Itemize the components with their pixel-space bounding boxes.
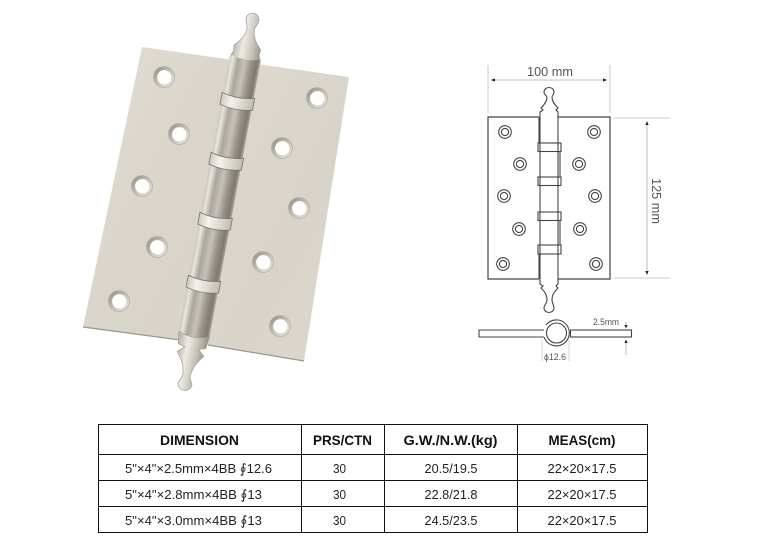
table grid: [98, 424, 648, 533]
table row 3: 5"×4"×3.0mm×4BB ∮13: [125, 513, 262, 528]
drawing screw holes: [497, 126, 602, 270]
table row 2: [125, 487, 616, 502]
table row 1: 20.5/19.5: [424, 461, 478, 476]
hinge outline: [488, 88, 610, 312]
top finial: [230, 10, 269, 63]
screw holes: [108, 66, 328, 336]
table row 3: 22×20×17.5: [548, 513, 616, 528]
bottom finial outline: [540, 279, 558, 312]
technical drawing: section view: [479, 317, 632, 363]
diameter dimension: ϕ12.6: ϕ12.6: [544, 352, 566, 363]
hinge photograph: [83, 10, 349, 393]
left leaf bottom edge: [83, 327, 180, 340]
table header: [160, 432, 616, 448]
thickness dimension: 2.5mm: 2.5mm: [593, 317, 619, 328]
table row 2: 22×20×17.5: [548, 487, 616, 502]
table row 3: 24.5/23.5: [424, 513, 478, 528]
thickness dimension: 2.5mm: [593, 317, 628, 355]
technical drawing: front view: [488, 64, 670, 312]
table header: G.W./N.W.(kg): [404, 432, 498, 448]
barrel: [178, 54, 261, 341]
table row 1: 30: [333, 461, 346, 476]
height dimension: 125 mm: [614, 118, 670, 278]
right leaf bottom edge: [208, 345, 304, 361]
table row 3: [125, 513, 616, 528]
table row 2: 22.8/21.8: [424, 487, 478, 502]
table row 1: 22×20×17.5: [548, 461, 616, 476]
knuckles: [538, 143, 561, 152]
table header: MEAS(cm): [548, 432, 616, 448]
table row 2: 5"×4"×2.8mm×4BB ∮13: [125, 487, 262, 502]
width dimension: 100 mm: [488, 64, 610, 113]
left hinge leaf: [83, 47, 240, 342]
width dimension: 100 mm: 100 mm: [527, 64, 573, 79]
height dimension: 125 mm: 125 mm: [649, 178, 664, 224]
open leaves and knuckle ring: [479, 320, 632, 346]
bottom finial: [169, 332, 209, 393]
table row 1: [125, 461, 616, 476]
table header: DIMENSION: [160, 432, 239, 448]
table row 3: 30: [333, 513, 346, 528]
specification table: [98, 424, 648, 533]
top finial outline: [540, 88, 558, 117]
right hinge leaf: [198, 63, 349, 361]
diameter dimension: ϕ12.6: [542, 340, 569, 363]
hinge barrel with knuckles and finials: [168, 10, 270, 393]
table row 1: 5"×4"×2.5mm×4BB ∮12.6: [125, 461, 272, 476]
table header: PRS/CTN: [313, 432, 372, 448]
table row 2: 30: [333, 487, 346, 502]
knuckle bands: [186, 92, 255, 295]
